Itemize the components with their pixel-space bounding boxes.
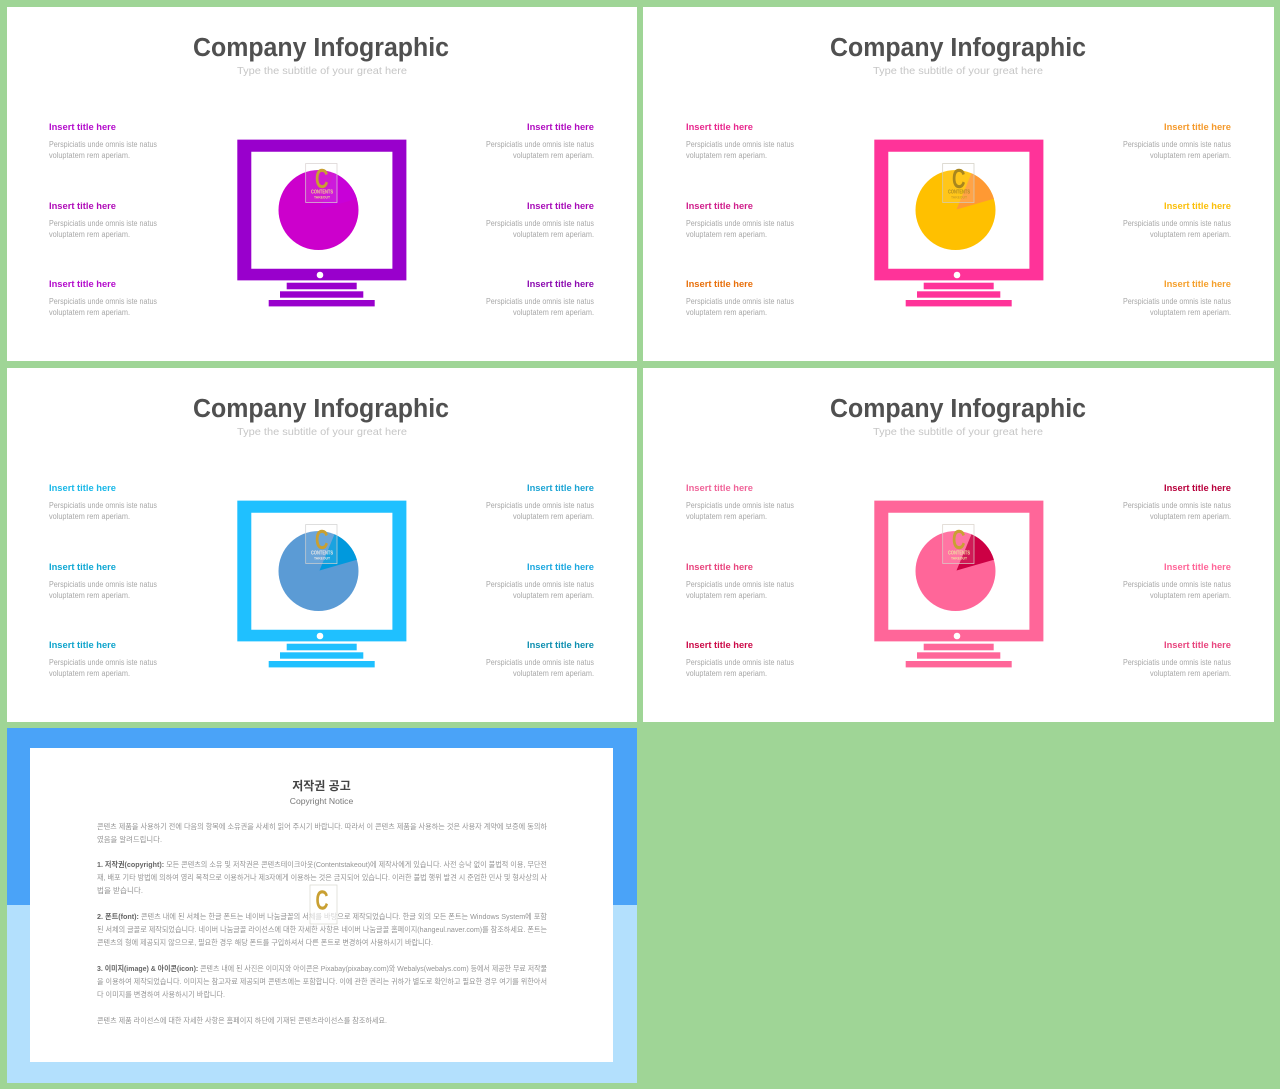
subtitle: Type the subtitle of your great here — [237, 426, 407, 438]
text block: left bottom: voluptatem rem aperiam. — [49, 669, 130, 678]
watermark logo: TAKEOUT — [314, 556, 331, 560]
watermark logo: TAKEOUT — [951, 556, 968, 560]
section: font: 2. 폰트(font): 콘텐츠 내에 된 서체는 한글 폰트는 네이버 나눔글꼴의 서체를 바탕으로 제작되었습니다. 한글 외의 모든 폰트는 Windows System에 포함 — [97, 911, 547, 921]
watermark logo: CONTENTS — [948, 190, 971, 196]
text block: left middle: Insert title here — [686, 201, 753, 211]
text block: right top — [486, 122, 594, 160]
text block: right top: voluptatem rem aperiam. — [1150, 151, 1231, 160]
text block: left bottom: voluptatem rem aperiam. — [686, 669, 767, 678]
text block: left middle: Perspiciatis unde omnis iste natus — [49, 580, 157, 589]
watermark logo — [306, 163, 337, 202]
text block: left middle: Perspiciatis unde omnis iste natus — [686, 580, 794, 589]
text block: right bottom — [1123, 640, 1231, 678]
text block: left top — [49, 483, 157, 521]
text block: left top: voluptatem rem aperiam. — [49, 151, 130, 160]
watermark logo: C — [952, 524, 966, 555]
text block: left top: Insert title here — [686, 122, 753, 132]
text block: right middle: voluptatem rem aperiam. — [513, 591, 594, 600]
watermark logo — [310, 884, 337, 924]
text block: left bottom: voluptatem rem aperiam. — [49, 308, 130, 317]
text block: right top: Perspiciatis unde omnis iste natus — [486, 501, 594, 510]
panel: purple slide — [7, 7, 637, 361]
text block: left top — [686, 483, 794, 521]
text block: right middle: Perspiciatis unde omnis iste natus — [486, 580, 594, 589]
text block: right middle: voluptatem rem aperiam. — [1150, 591, 1231, 600]
copyright heading: 저작권 공고 — [292, 778, 351, 793]
text block: right top — [1123, 483, 1231, 521]
copyright subtitle: Copyright Notice — [290, 796, 353, 806]
text block: right bottom: Perspiciatis unde omnis iste natus — [486, 658, 594, 667]
intro paragraph: 였음을 알려드립니다. — [97, 834, 162, 844]
watermark logo — [943, 163, 974, 202]
text block: right bottom: Perspiciatis unde omnis iste natus — [1123, 658, 1231, 667]
watermark logo: TAKEOUT — [314, 196, 331, 200]
text block: right bottom: Insert title here — [527, 640, 594, 650]
subtitle: Type the subtitle of your great here — [237, 65, 407, 77]
text block: right bottom — [1123, 279, 1231, 317]
text block: right bottom: Perspiciatis unde omnis iste natus — [1123, 297, 1231, 306]
text block: left middle: Insert title here — [686, 562, 753, 572]
text block: left top: voluptatem rem aperiam. — [686, 151, 767, 160]
text block: left bottom — [686, 640, 794, 678]
text block: right top: Perspiciatis unde omnis iste natus — [1123, 501, 1231, 510]
text block: left middle: Perspiciatis unde omnis iste natus — [686, 219, 794, 228]
text block: right middle — [1123, 562, 1231, 600]
text block: right top — [486, 483, 594, 521]
subtitle: Type the subtitle of your great here — [873, 426, 1043, 438]
text block: right bottom: Insert title here — [527, 279, 594, 289]
section: copyright: 1. 저작권(copyright): 모든 콘텐츠의 소유 및 저작권은 콘텐츠테이크아웃(Contentstakeout)에 제작사에게 있습니다. 사전 승낙 없이 불법적 이용, 무단전 — [97, 859, 547, 869]
text block: left middle: voluptatem rem aperiam. — [686, 591, 767, 600]
text block: right bottom: Perspiciatis unde omnis iste natus — [486, 297, 594, 306]
panel: copyright notice — [7, 728, 637, 1083]
text block: left bottom: Perspiciatis unde omnis iste natus — [686, 297, 794, 306]
text block: left middle — [49, 201, 157, 239]
text block: left top: Perspiciatis unde omnis iste natus — [686, 140, 794, 149]
text block: right middle: Perspiciatis unde omnis iste natus — [486, 219, 594, 228]
text block: left middle: Insert title here — [49, 562, 116, 572]
text block: right top: Insert title here — [527, 122, 594, 132]
watermark logo: C — [316, 884, 328, 916]
text block: right top: Perspiciatis unde omnis iste natus — [1123, 140, 1231, 149]
text block: left bottom — [686, 279, 794, 317]
text block: left bottom — [49, 279, 157, 317]
text block: right top — [1123, 122, 1231, 160]
text block: right middle: Perspiciatis unde omnis iste natus — [1123, 219, 1231, 228]
icon: monitor — [874, 140, 1043, 306]
watermark logo: C — [952, 163, 966, 194]
icon: monitor — [237, 501, 406, 667]
icon: monitor — [237, 140, 406, 306]
text block: left top: Insert title here — [686, 483, 753, 493]
section: font — [97, 911, 547, 947]
text block: right bottom: voluptatem rem aperiam. — [1150, 669, 1231, 678]
pie chart — [916, 170, 996, 250]
text block: right middle: Insert title here — [527, 201, 594, 211]
intro paragraph — [97, 821, 547, 844]
text block: left top — [686, 122, 794, 160]
intro paragraph: 콘텐츠 제품을 사용하기 전에 다음의 항목에 소유권을 사세히 읽어 주시기 바랍니다. 따라서 이 콘텐츠 제품을 사용하는 것은 사용자 계약에 보증에 동의하 — [97, 821, 547, 831]
text block: right middle: voluptatem rem aperiam. — [513, 230, 594, 239]
text block: left bottom: Perspiciatis unde omnis iste natus — [686, 658, 794, 667]
text block: left top: voluptatem rem aperiam. — [49, 512, 130, 521]
watermark logo: CONTENTS — [948, 550, 971, 556]
section: image and icon: 다 이미지를 변경하여 사용하시기 바랍니다. — [97, 989, 225, 999]
section: font: 콘텐츠의 형에 제공되지 않으므로, 필요한 경우 해당 폰트를 구입하셔서 다른 폰트로 변경하여 사용하시기 바랍니다. — [97, 937, 433, 947]
text block: left top: voluptatem rem aperiam. — [686, 512, 767, 521]
section: copyright: 법을 받습니다. — [97, 885, 143, 895]
text block: right top: Perspiciatis unde omnis iste natus — [486, 140, 594, 149]
section: image and icon: 을 이용하여 제작되었습니다. 이미지는 참고자료 제공되며 콘텐츠에는 포함합니다. 이에 관한 권리는 귀하가 별도로 확인하고 필요한 경우 여기를 위한아서 — [97, 976, 547, 986]
text block: right middle: Insert title here — [1164, 562, 1231, 572]
text block: left middle: voluptatem rem aperiam. — [686, 230, 767, 239]
text block: right top: voluptatem rem aperiam. — [1150, 512, 1231, 521]
text block: right top: Insert title here — [527, 483, 594, 493]
text block: left middle: Perspiciatis unde omnis iste natus — [49, 219, 157, 228]
text block: left top: Insert title here — [49, 122, 116, 132]
subtitle: Type the subtitle of your great here — [873, 65, 1043, 77]
section: image and icon: 3. 이미지(image) & 아이콘(icon): 콘텐츠 내에 된 사진은 이미지와 아이콘은 Pixabay(pixabay.com)와 Webalys(webalys.com) 등에서 제공한 무료 저작물 — [97, 963, 547, 973]
watermark logo: C — [315, 163, 328, 194]
watermark logo — [943, 524, 974, 564]
text block: right top: voluptatem rem aperiam. — [513, 512, 594, 521]
text block: left middle — [686, 562, 794, 600]
text block: left bottom: Insert title here — [686, 640, 753, 650]
icon: monitor — [874, 501, 1043, 667]
text block: left bottom: Insert title here — [49, 640, 116, 650]
heading: Company Infographic — [193, 34, 449, 62]
text block: right middle: Insert title here — [1164, 201, 1231, 211]
text block: left bottom: Perspiciatis unde omnis iste natus — [49, 658, 157, 667]
text block: right top: Insert title here — [1164, 483, 1231, 493]
text block: right bottom: Insert title here — [1164, 279, 1231, 289]
text block: left top: Perspiciatis unde omnis iste natus — [686, 501, 794, 510]
text block: right middle: voluptatem rem aperiam. — [1150, 230, 1231, 239]
text block: left bottom: Perspiciatis unde omnis iste natus — [49, 297, 157, 306]
section: image and icon — [97, 963, 547, 999]
text block: right bottom — [486, 279, 594, 317]
text block: right middle — [486, 562, 594, 600]
heading: Company Infographic — [830, 34, 1086, 62]
text block: left middle: Insert title here — [49, 201, 116, 211]
text block: right bottom: Insert title here — [1164, 640, 1231, 650]
pie chart — [916, 531, 996, 611]
text block: left bottom: voluptatem rem aperiam. — [686, 308, 767, 317]
heading: Company Infographic — [830, 395, 1086, 423]
text block: left middle — [686, 201, 794, 239]
heading: Company Infographic — [193, 395, 449, 423]
text block: left middle: voluptatem rem aperiam. — [49, 591, 130, 600]
text block: right bottom: voluptatem rem aperiam. — [513, 669, 594, 678]
text block: left top: Insert title here — [49, 483, 116, 493]
text block: left middle — [49, 562, 157, 600]
text block: left bottom: Insert title here — [49, 279, 116, 289]
panel: blue slide — [7, 368, 637, 722]
panel: pink and yellow slide — [643, 7, 1274, 361]
text block: left bottom — [49, 640, 157, 678]
text block: right middle: Insert title here — [527, 562, 594, 572]
text block: right top: Insert title here — [1164, 122, 1231, 132]
watermark logo: TAKEOUT — [951, 196, 968, 200]
text block: right middle — [1123, 201, 1231, 239]
text block: right bottom: voluptatem rem aperiam. — [513, 308, 594, 317]
closing note: 콘텐츠 제품 라이선스에 대한 자세한 사항은 홈페이지 하단에 기재된 콘텐츠라이선스를 참조하세요. — [97, 1015, 387, 1025]
text block: left top — [49, 122, 157, 160]
pie chart — [278, 531, 358, 611]
text block: left top: Perspiciatis unde omnis iste natus — [49, 501, 157, 510]
panel: rose slide — [643, 368, 1274, 722]
text block: left middle: voluptatem rem aperiam. — [49, 230, 130, 239]
text block: right bottom — [486, 640, 594, 678]
watermark logo: CONTENTS — [311, 550, 334, 556]
section: font: 된 서체의 글꼴로 제작되었습니다. 네이버 나눔글꼴 라이선스에 대한 자세한 사항은 네이버 나눔글꼴 홈페이지(hangeul.naver.com)를 참조하세요. 폰트는 — [97, 924, 547, 934]
pie chart — [278, 170, 358, 250]
text block: left top: Perspiciatis unde omnis iste natus — [49, 140, 157, 149]
text block: right bottom: voluptatem rem aperiam. — [1150, 308, 1231, 317]
section: copyright: 재, 배포 기타 방법에 의하여 영리 목적으로 이용하거나 제3자에게 이용하는 것은 금지되어 있습니다. 이러한 불법 행위 발견 시 준엄한 민사 및 형사상의 사 — [97, 872, 547, 882]
watermark logo — [306, 524, 337, 564]
watermark logo: CONTENTS — [311, 190, 334, 196]
watermark logo: C — [315, 524, 328, 555]
text block: right middle — [486, 201, 594, 239]
text block: left bottom: Insert title here — [686, 279, 753, 289]
text block: right middle: Perspiciatis unde omnis iste natus — [1123, 580, 1231, 589]
section: copyright — [97, 859, 547, 895]
text block: right top: voluptatem rem aperiam. — [513, 151, 594, 160]
